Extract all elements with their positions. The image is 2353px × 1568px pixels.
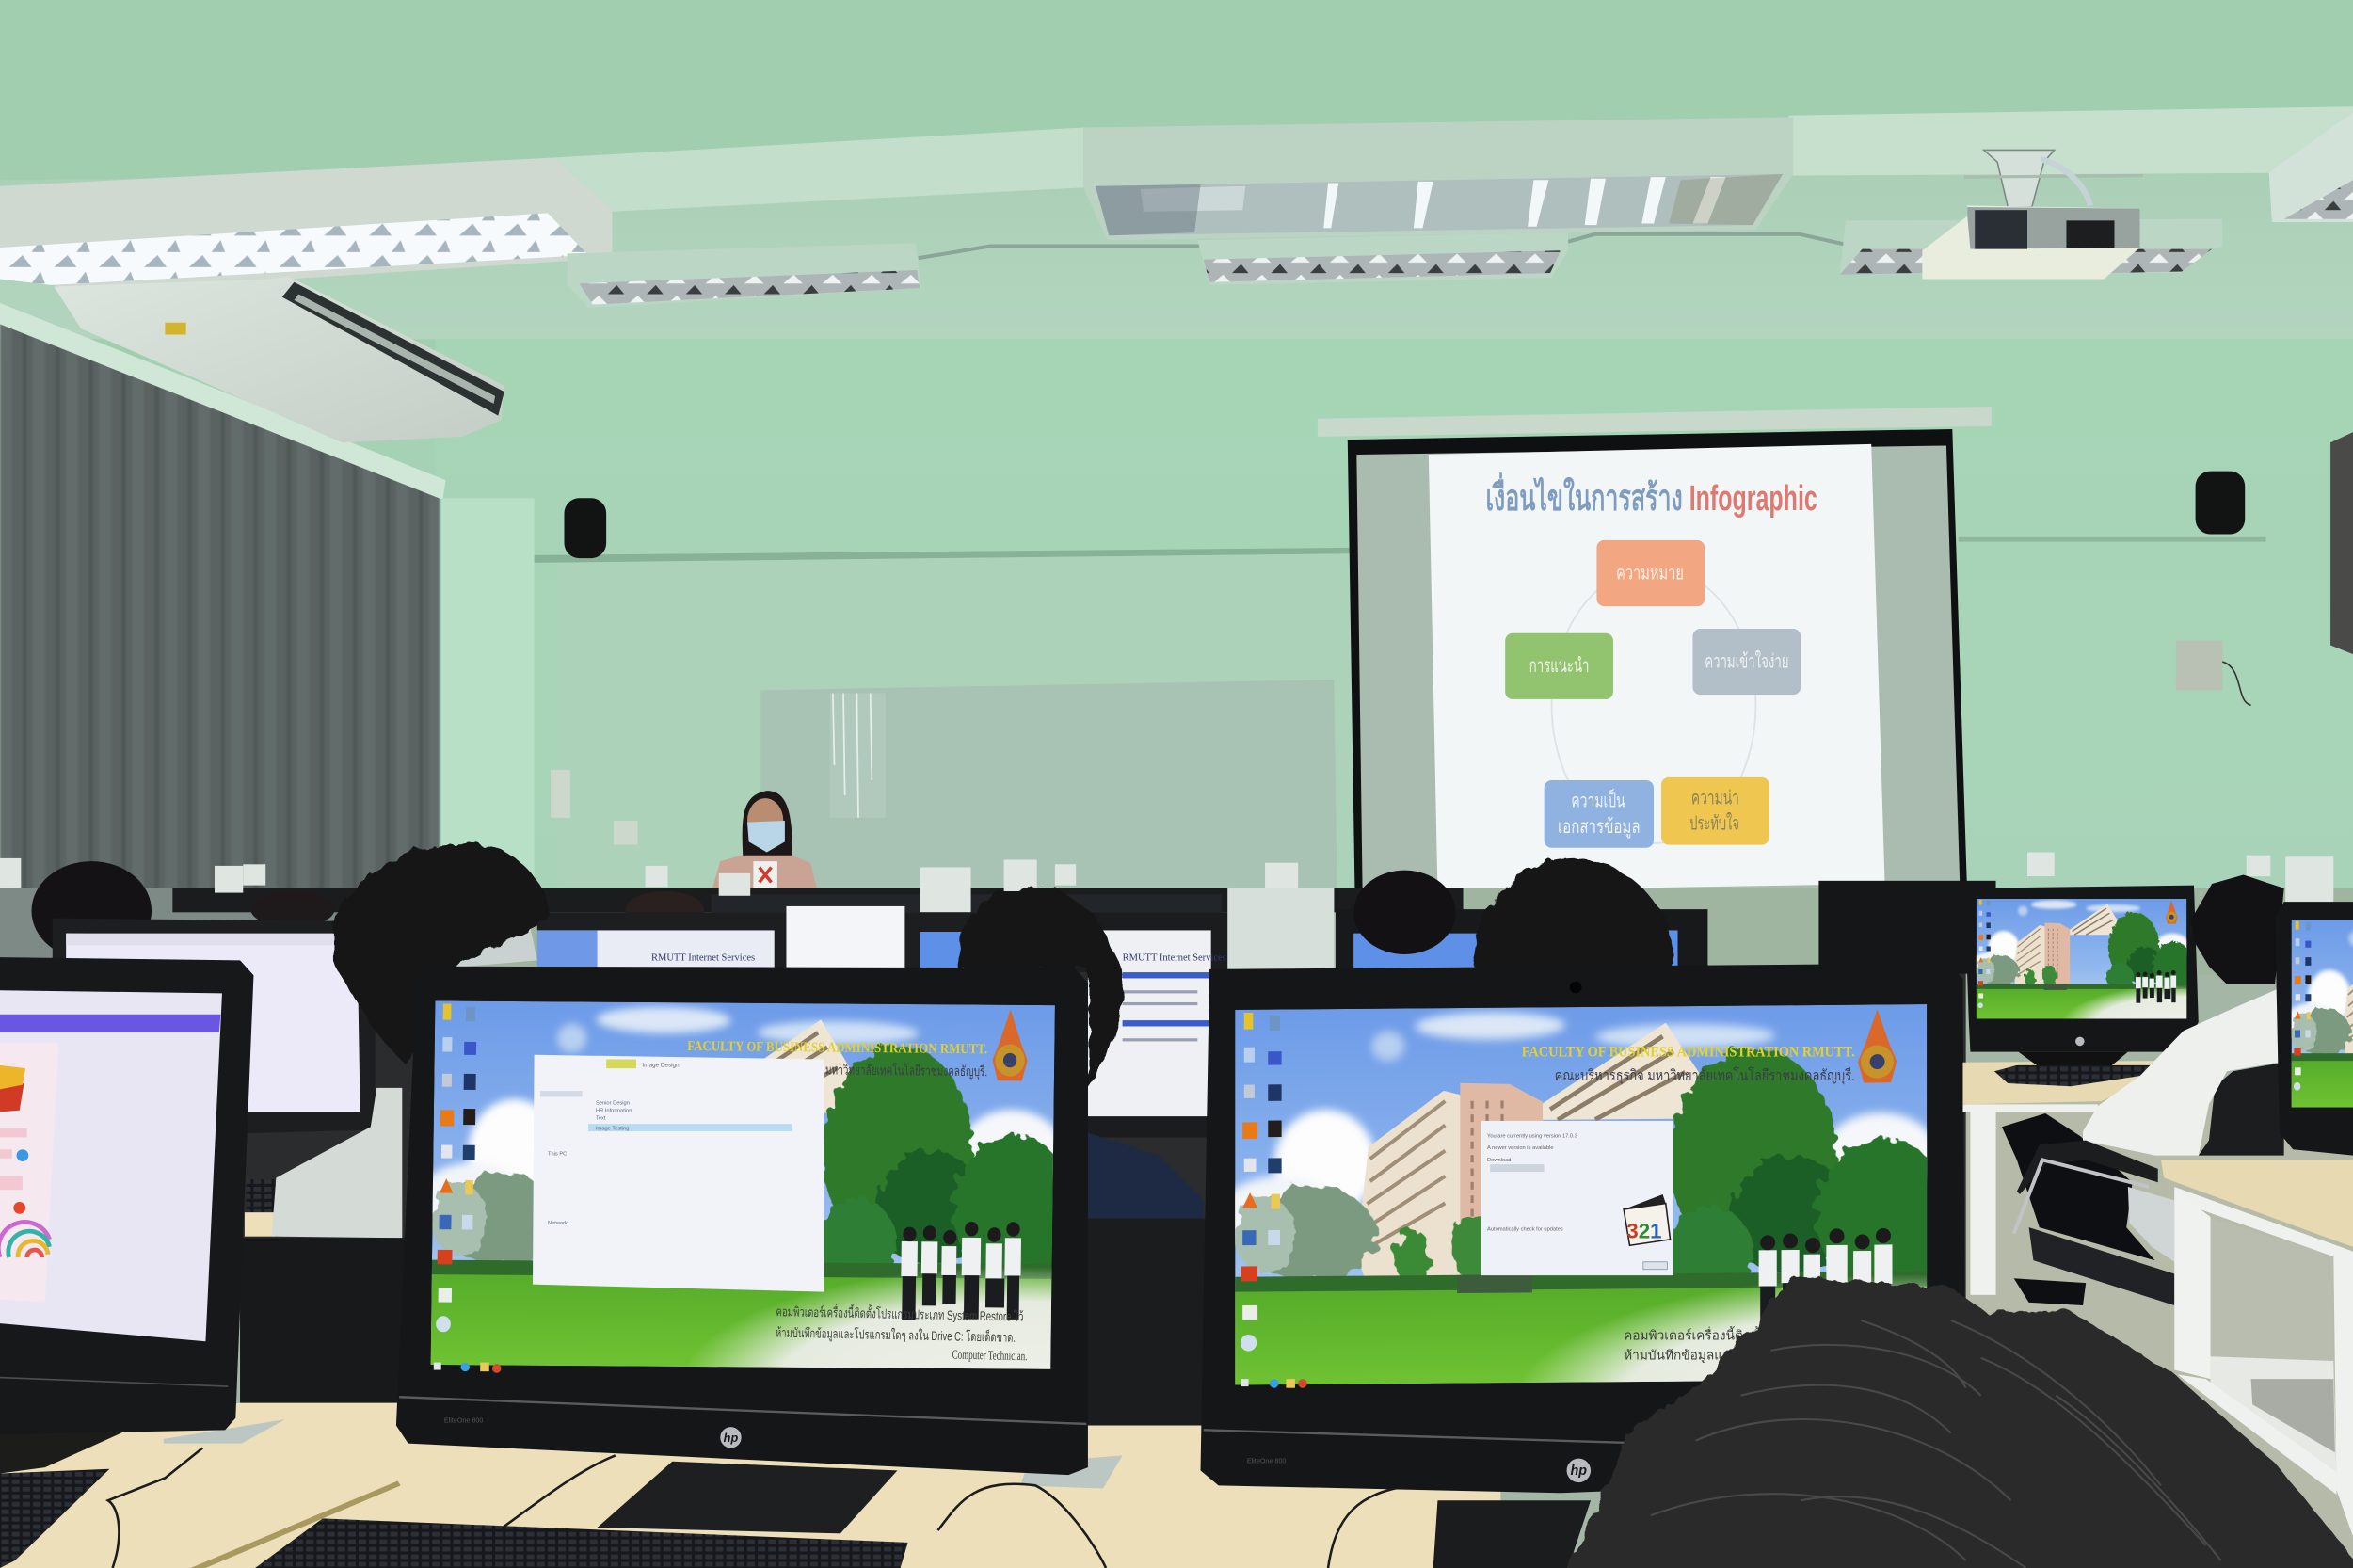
room background	[0, 0, 2353, 909]
student left	[272, 843, 552, 1238]
wallpaper thai heading: คณะบริหารธุรกิจ มหาวิทยาลัยเทคโนโลยีราชมงคลธัญบุรี.	[1555, 1066, 1855, 1085]
ceiling light small centre	[1197, 232, 1568, 285]
cabinet panel	[2211, 1219, 2333, 1361]
desk top	[2161, 1160, 2353, 1247]
update dialog	[1481, 1121, 1673, 1275]
bottom stripe	[0, 1378, 228, 1386]
desk rail	[1962, 1104, 2098, 1112]
paper cards	[0, 853, 2333, 914]
shoes	[2014, 1278, 2086, 1305]
far screen strip	[712, 894, 1222, 912]
hair strands	[1651, 1320, 2221, 1568]
white card	[427, 867, 537, 968]
side panel	[0, 1043, 58, 1303]
left monitor back	[53, 867, 537, 1237]
desk leg	[1970, 1111, 1996, 1295]
chair back	[2199, 1063, 2284, 1156]
cable port right	[1020, 1455, 1123, 1489]
shirt	[1088, 1133, 1204, 1223]
screen wallpaper	[1235, 1004, 1928, 1385]
far right monitor	[2275, 902, 2353, 1156]
far monitor strip	[172, 888, 1464, 912]
right front desk	[2161, 1160, 2353, 1537]
far head	[250, 891, 335, 927]
taskbar icons	[1241, 1379, 1307, 1388]
pillar	[441, 498, 535, 901]
left leg	[2174, 1190, 2211, 1379]
bezel line	[1204, 1430, 1951, 1452]
ceiling beam left	[555, 128, 1083, 212]
screen frame	[1348, 429, 1967, 906]
box: easy to understand	[1692, 629, 1801, 695]
model label: EliteOne 800	[444, 1416, 483, 1424]
box: guidance: การแนะนำ	[1529, 655, 1589, 677]
small keyboard	[246, 1179, 276, 1212]
browser heading text: RMUTT Internet Services	[651, 952, 755, 963]
blind valance	[0, 303, 446, 500]
hp logo	[720, 1427, 742, 1448]
top bar	[0, 1015, 220, 1032]
update dialog: A newer version is available	[1487, 1145, 1554, 1151]
projection screen	[1318, 407, 1992, 906]
frame	[0, 957, 253, 1434]
diffuser	[0, 213, 588, 285]
wallpaper notice: คอมพิวเตอร์เครื่องนี้ติดตั้งโปรแกรมประเภท System Restore ไว้	[776, 1302, 1024, 1324]
box: guidance	[1505, 633, 1613, 699]
box: impressive: ประทับใจ	[1689, 812, 1739, 835]
whiteboard	[760, 680, 1337, 893]
foreground head	[1545, 1277, 2353, 1568]
ceiling light centre	[1083, 117, 1793, 240]
box: impressive	[1661, 777, 1769, 845]
speaker right	[2196, 472, 2245, 535]
ceiling	[0, 0, 2353, 360]
far head centre right	[1353, 871, 1456, 954]
right wall edge	[2330, 432, 2353, 654]
vent	[282, 282, 504, 416]
blinds	[0, 323, 440, 901]
paper with red cross	[753, 861, 777, 888]
ceiling beam right	[1789, 106, 2353, 176]
wallpaper thai heading: มหาวิทยาลัยเทคโนโลยีราชมงคลธัญบุรี.	[825, 1062, 987, 1080]
shirt	[2083, 989, 2278, 1156]
ceiling light small left	[568, 243, 921, 308]
stand	[598, 1462, 897, 1533]
wallpaper notice	[1624, 1326, 1791, 1363]
back desk	[1962, 1061, 2158, 1104]
hp logo: hp	[1571, 1464, 1587, 1479]
hair	[957, 887, 1126, 1088]
wallpaper notice: ห้ามบันทึกข้อมูลและโปรแกรมใดๆ ลงใน Drive C: โดยเด็ดขาด.	[776, 1323, 1016, 1346]
slide title: เงื่อนไขในการสร้าง Infographic	[1485, 472, 1817, 519]
connecting ring	[1552, 568, 1755, 843]
hair	[2191, 874, 2284, 984]
taskbar icons	[434, 1363, 502, 1373]
inner box	[2251, 1379, 2335, 1452]
presenter	[710, 791, 820, 897]
file explorer window: Senior Design	[596, 1100, 630, 1106]
wall ledge	[533, 548, 1351, 563]
back row desks band	[0, 853, 2353, 978]
file explorer window	[533, 1055, 824, 1292]
far head left	[31, 861, 152, 960]
file explorer window: This PC	[548, 1152, 567, 1158]
mount	[1984, 150, 2055, 207]
air conditioner	[54, 276, 504, 442]
back screen	[66, 934, 360, 1112]
update dialog: Download	[1487, 1158, 1511, 1163]
conduit	[919, 234, 1846, 258]
cables	[108, 1448, 1411, 1568]
desk shadow	[0, 1426, 138, 1474]
mid row paper card	[1227, 888, 1334, 969]
right leg	[2333, 1252, 2353, 1537]
speaker left	[564, 498, 606, 558]
trousers	[2002, 1113, 2155, 1260]
hp logo	[2075, 1037, 2085, 1046]
hair	[743, 791, 792, 856]
faint cross	[457, 893, 503, 945]
file explorer window: Image Design	[642, 1063, 680, 1069]
blouse	[710, 853, 820, 897]
fries icon	[0, 1065, 25, 1112]
screen grey surface	[1356, 445, 1960, 897]
projector	[1922, 150, 2143, 280]
box: meaning	[1596, 540, 1705, 606]
screen housing	[1318, 407, 1992, 437]
box: meaning: ความหมาย	[1616, 562, 1684, 584]
screen wallpaper	[431, 1000, 1055, 1369]
hp logo: hp	[724, 1431, 738, 1445]
chair arm	[2017, 1141, 2158, 1194]
screen	[0, 990, 222, 1341]
desk surface	[0, 1403, 1500, 1568]
rail	[2174, 1187, 2353, 1263]
lower wall panel	[558, 553, 1351, 901]
name tags	[0, 1128, 27, 1190]
monitor two	[1201, 964, 1965, 1493]
rear panel	[1967, 207, 2140, 249]
monitor two stand	[1433, 1500, 1591, 1568]
cable port	[164, 1419, 285, 1444]
right side furniture	[1962, 1061, 2158, 1295]
right back monitor	[1967, 885, 2199, 1086]
box: documentary data	[1545, 780, 1654, 848]
mid row monitor far right	[1336, 909, 1707, 972]
model label: EliteOne 800	[1247, 1457, 1286, 1464]
file explorer window: Image Testing	[596, 1126, 629, 1131]
side wall	[435, 339, 2353, 909]
screen wallpaper	[1977, 899, 2187, 1018]
face	[747, 798, 783, 843]
dark monitor back	[1818, 881, 1996, 974]
wallpaper notice	[775, 1302, 1029, 1363]
file explorer window: Text	[596, 1115, 606, 1121]
hp logo	[1567, 1459, 1591, 1482]
bezel line	[399, 1397, 1086, 1424]
keyboard	[1994, 1065, 2152, 1086]
ceiling lower bay	[0, 150, 2353, 339]
monitor one	[395, 966, 1088, 1534]
right ledge	[1959, 537, 2266, 542]
front keyboard	[255, 1518, 908, 1568]
body	[1922, 205, 2140, 280]
shirt tail	[2128, 1187, 2174, 1262]
chrome frame	[2014, 1160, 2149, 1233]
wall switch panel	[551, 770, 638, 845]
mid row white screen	[786, 906, 904, 972]
wallpaper heading: FACULTY OF BUSINESS ADMINISTRATION RMUTT.	[1522, 1044, 1855, 1060]
left keyboard	[0, 1469, 109, 1568]
codec pack logo	[1624, 1194, 1671, 1245]
file explorer window: Quick access	[548, 1092, 580, 1097]
wallpaper notice: คอมพิวเตอร์เครื่องนี้ติดตั้ง	[1624, 1326, 1766, 1343]
chair seat	[2029, 1227, 2174, 1305]
slide page	[1429, 444, 1885, 891]
coloured dots	[13, 1149, 28, 1214]
far right light	[2269, 113, 2353, 222]
mid row monitor centre right	[904, 912, 1230, 1137]
file explorer window: HR Information	[596, 1108, 632, 1113]
shirt	[272, 1088, 402, 1238]
desk seam	[190, 1481, 401, 1568]
codec pack logo: 321	[1626, 1219, 1662, 1242]
box: impressive: ความน่า	[1691, 788, 1739, 809]
wallpaper notice: ห้ามบันทึกข้อมูลและโปรแกรม	[1624, 1347, 1791, 1363]
box: documentary data: เอกสารข้อมูล	[1558, 816, 1641, 839]
student right	[2002, 874, 2284, 1305]
shelf	[2211, 1356, 2336, 1478]
frame	[396, 967, 1088, 1475]
ac badge	[165, 323, 186, 335]
webcam	[1570, 982, 1581, 993]
bottom rail	[2177, 1374, 2336, 1495]
stand	[2018, 1052, 2128, 1068]
box: easy to understand: ความเข้าใจง่าย	[1705, 649, 1789, 672]
student middle	[957, 887, 1204, 1223]
light behind projector	[1840, 219, 2222, 275]
small desk patch	[245, 1212, 275, 1237]
far head centre	[626, 891, 704, 927]
update dialog: You are currently using version 17.0.3	[1487, 1133, 1577, 1139]
update dialog: Automatically check for updates	[1487, 1226, 1563, 1232]
lower floor and right region	[0, 969, 2353, 1568]
curly hair head	[1474, 858, 1674, 972]
frame	[1201, 964, 1966, 1493]
wallpaper heading: FACULTY OF BUSINESS ADMINISTRATION RMUTT.	[687, 1039, 987, 1057]
box: documentary data: ความเป็น	[1571, 788, 1625, 812]
browser page text: RMUTT Internet Services	[1123, 952, 1226, 963]
mid row monitor centre left	[537, 912, 790, 972]
wall outlet box	[2176, 641, 2251, 705]
left monitor	[0, 957, 253, 1434]
file explorer window: Network	[548, 1221, 568, 1226]
ceiling light left	[0, 157, 613, 293]
hair	[333, 843, 552, 1061]
chair backs	[240, 1219, 1209, 1444]
face mask	[747, 821, 785, 853]
rainbow	[0, 1222, 50, 1257]
wallpaper notice: Computer Technician.	[952, 1348, 1028, 1363]
